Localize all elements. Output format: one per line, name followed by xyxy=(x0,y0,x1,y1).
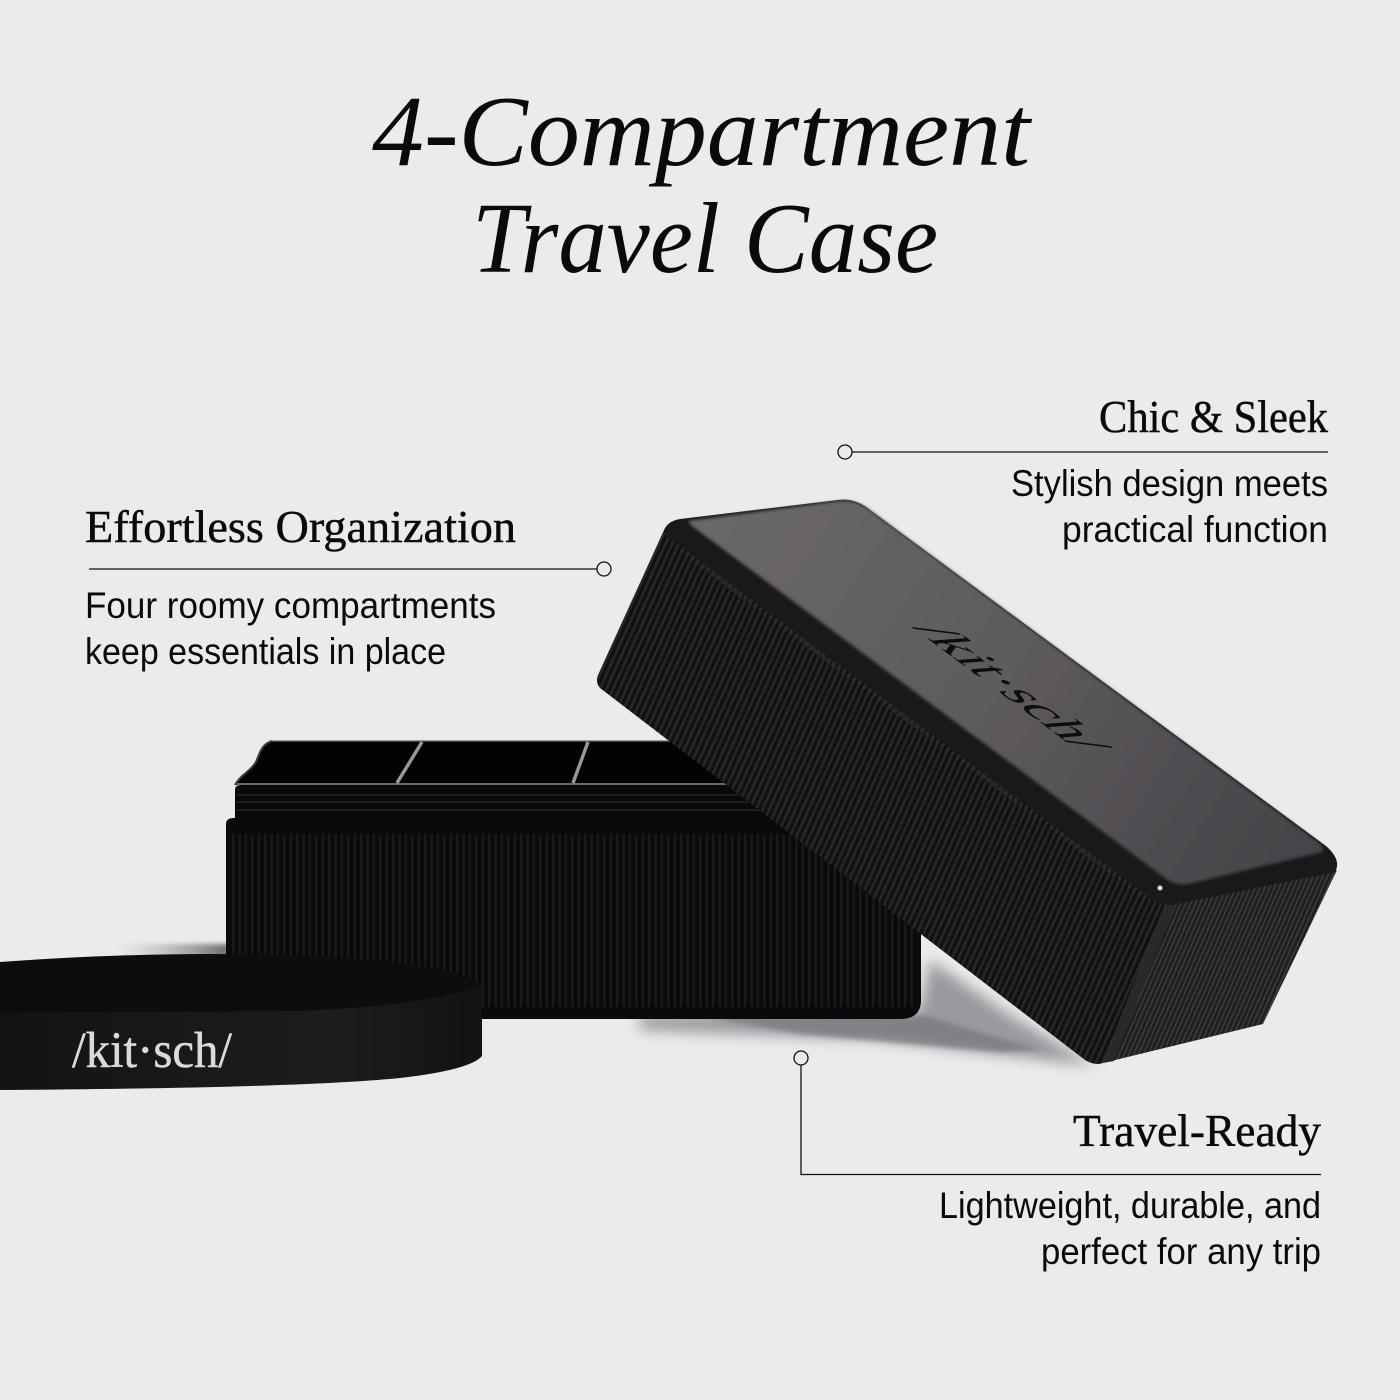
callout: travel-ready xyxy=(794,1051,1321,1272)
case lid xyxy=(597,500,1337,1064)
lid side face xyxy=(597,530,1165,1064)
ribbed scallop edge xyxy=(676,546,1146,898)
product shadows xyxy=(117,944,1095,1066)
side and end rounded seam xyxy=(1103,903,1176,1063)
silicone strap xyxy=(0,954,482,1090)
lid end face xyxy=(1103,870,1337,1063)
callout: chic and sleek xyxy=(838,391,1328,550)
title: Travel Case xyxy=(472,182,938,294)
embossed logo: /kit·sch/ xyxy=(900,623,1126,752)
strap logo: /kit·sch/ xyxy=(72,1023,233,1079)
lid top face xyxy=(688,501,1323,884)
lid bevel xyxy=(664,500,1337,905)
title xyxy=(372,75,1033,294)
strap inner xyxy=(0,954,482,1015)
strap front band xyxy=(0,984,482,1090)
title: 4-Compartment xyxy=(372,75,1033,187)
callout: travel-ready: perfect for any trip xyxy=(1041,1231,1321,1272)
callout: effortless organization: keep essentials in place xyxy=(85,631,446,672)
callout: chic and sleek: practical function xyxy=(1062,509,1328,550)
callout: effortless organization xyxy=(85,501,611,672)
callout: travel-ready: Travel-Ready xyxy=(1073,1105,1321,1156)
callout: effortless organization: Effortless Organization xyxy=(85,501,516,552)
callout: chic and sleek: Chic & Sleek xyxy=(1099,391,1328,442)
callout: travel-ready: Lightweight, durable, and xyxy=(939,1185,1321,1226)
callout: chic and sleek: Stylish design meets xyxy=(1011,463,1328,504)
stacked rim xyxy=(235,785,800,825)
case base xyxy=(226,741,921,1019)
callout: effortless organization: Four roomy compartments xyxy=(85,585,496,626)
compartment interior xyxy=(235,741,745,785)
corner highlight xyxy=(1158,886,1162,890)
ribbed outer shell xyxy=(226,818,921,1019)
